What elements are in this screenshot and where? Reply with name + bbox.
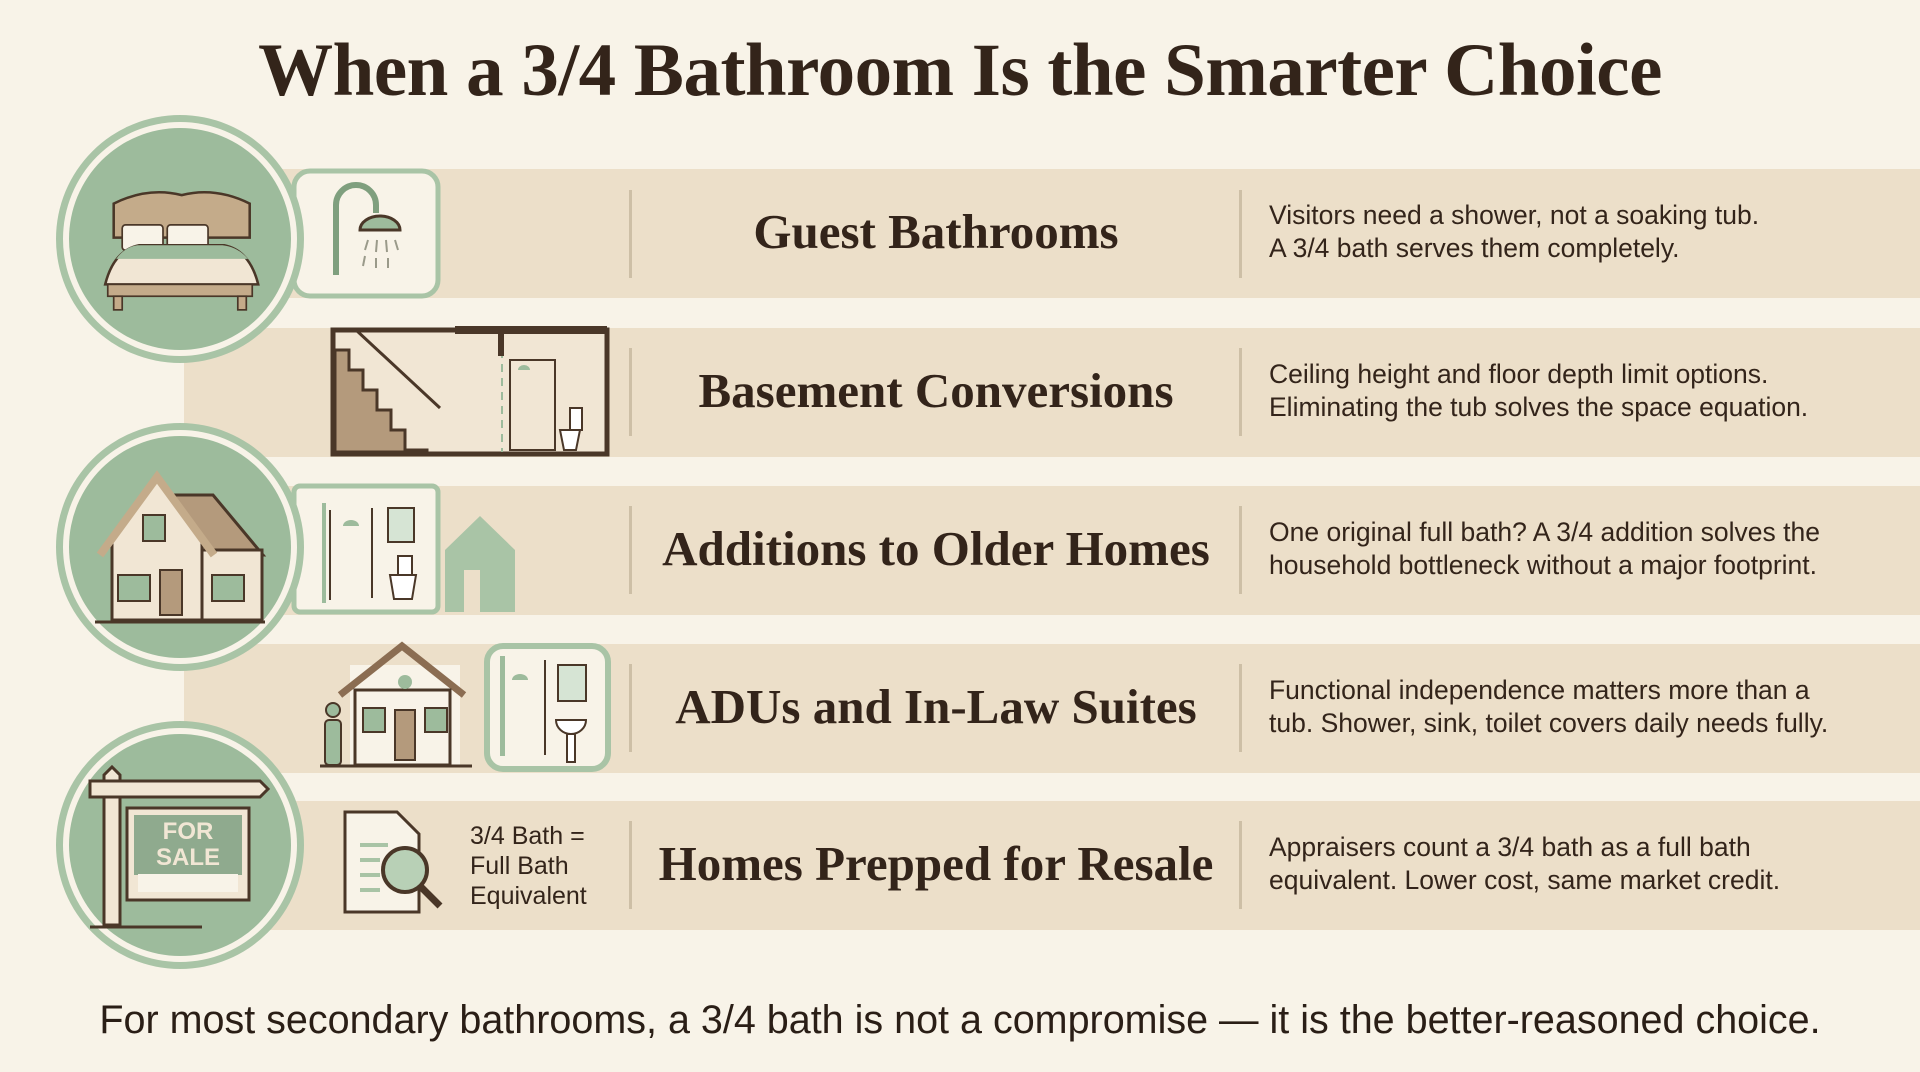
- title: When a 3/4 Bathroom Is the Smarter Choice: [258, 29, 1662, 112]
- band: basement: [184, 328, 1920, 457]
- description: Ceiling height and floor depth limit options.: [1269, 359, 1768, 389]
- description: Eliminating the tub solves the space equation.: [1269, 392, 1808, 422]
- icon: basement cross-section: [333, 330, 607, 454]
- callout: equivalent: Equivalent: [470, 882, 587, 910]
- description: tub. Shower, sink, toilet covers daily needs fully.: [1269, 708, 1828, 738]
- callout: equivalent: 3/4 Bath =: [470, 822, 585, 850]
- heading: Additions to Older Homes: [662, 521, 1210, 576]
- description: equivalent. Lower cost, same market credit.: [1269, 865, 1780, 895]
- description: Visitors need a shower, not a soaking tub.: [1269, 200, 1759, 230]
- heading: ADUs and In-Law Suites: [675, 679, 1197, 734]
- description: [1269, 675, 1828, 738]
- footer statement: For most secondary bathrooms, a 3/4 bath is not a compromise — it is the better-reasoned choice.: [99, 998, 1821, 1042]
- description: [1269, 359, 1808, 422]
- icon circle: old house: [56, 423, 304, 671]
- description: Functional independence matters more than a: [1269, 675, 1810, 705]
- icon circle: for sale: FOR: [163, 818, 213, 845]
- icon circle: for sale: SALE: [156, 844, 220, 871]
- icon: shower box: [294, 171, 438, 296]
- description: A 3/4 bath serves them completely.: [1269, 233, 1679, 263]
- description: Appraisers count a 3/4 bath as a full bath: [1269, 832, 1751, 862]
- icon: bath bubble: [487, 646, 608, 769]
- icon circle: bed: [56, 115, 304, 363]
- band: guest bathrooms: [100, 169, 1920, 298]
- heading: Basement Conversions: [698, 363, 1174, 418]
- callout: equivalent: Full Bath: [470, 852, 569, 880]
- description: One original full bath? A 3/4 addition solves the: [1269, 517, 1820, 547]
- description: [1269, 200, 1759, 263]
- description: household bottleneck without a major footprint.: [1269, 550, 1817, 580]
- icon: addition box: [294, 486, 515, 612]
- description: [1269, 517, 1820, 580]
- icon: ADU house: [320, 646, 472, 766]
- band: additions: [100, 486, 1920, 615]
- description: [1269, 832, 1780, 895]
- band: resale: [100, 801, 1920, 930]
- heading: Guest Bathrooms: [753, 204, 1119, 259]
- heading: Homes Prepped for Resale: [659, 836, 1213, 891]
- icon: document magnifier: [345, 812, 440, 912]
- callout: equivalent: [470, 822, 587, 910]
- icon circle: for sale: [56, 721, 304, 969]
- band: ADUs: [184, 644, 1920, 773]
